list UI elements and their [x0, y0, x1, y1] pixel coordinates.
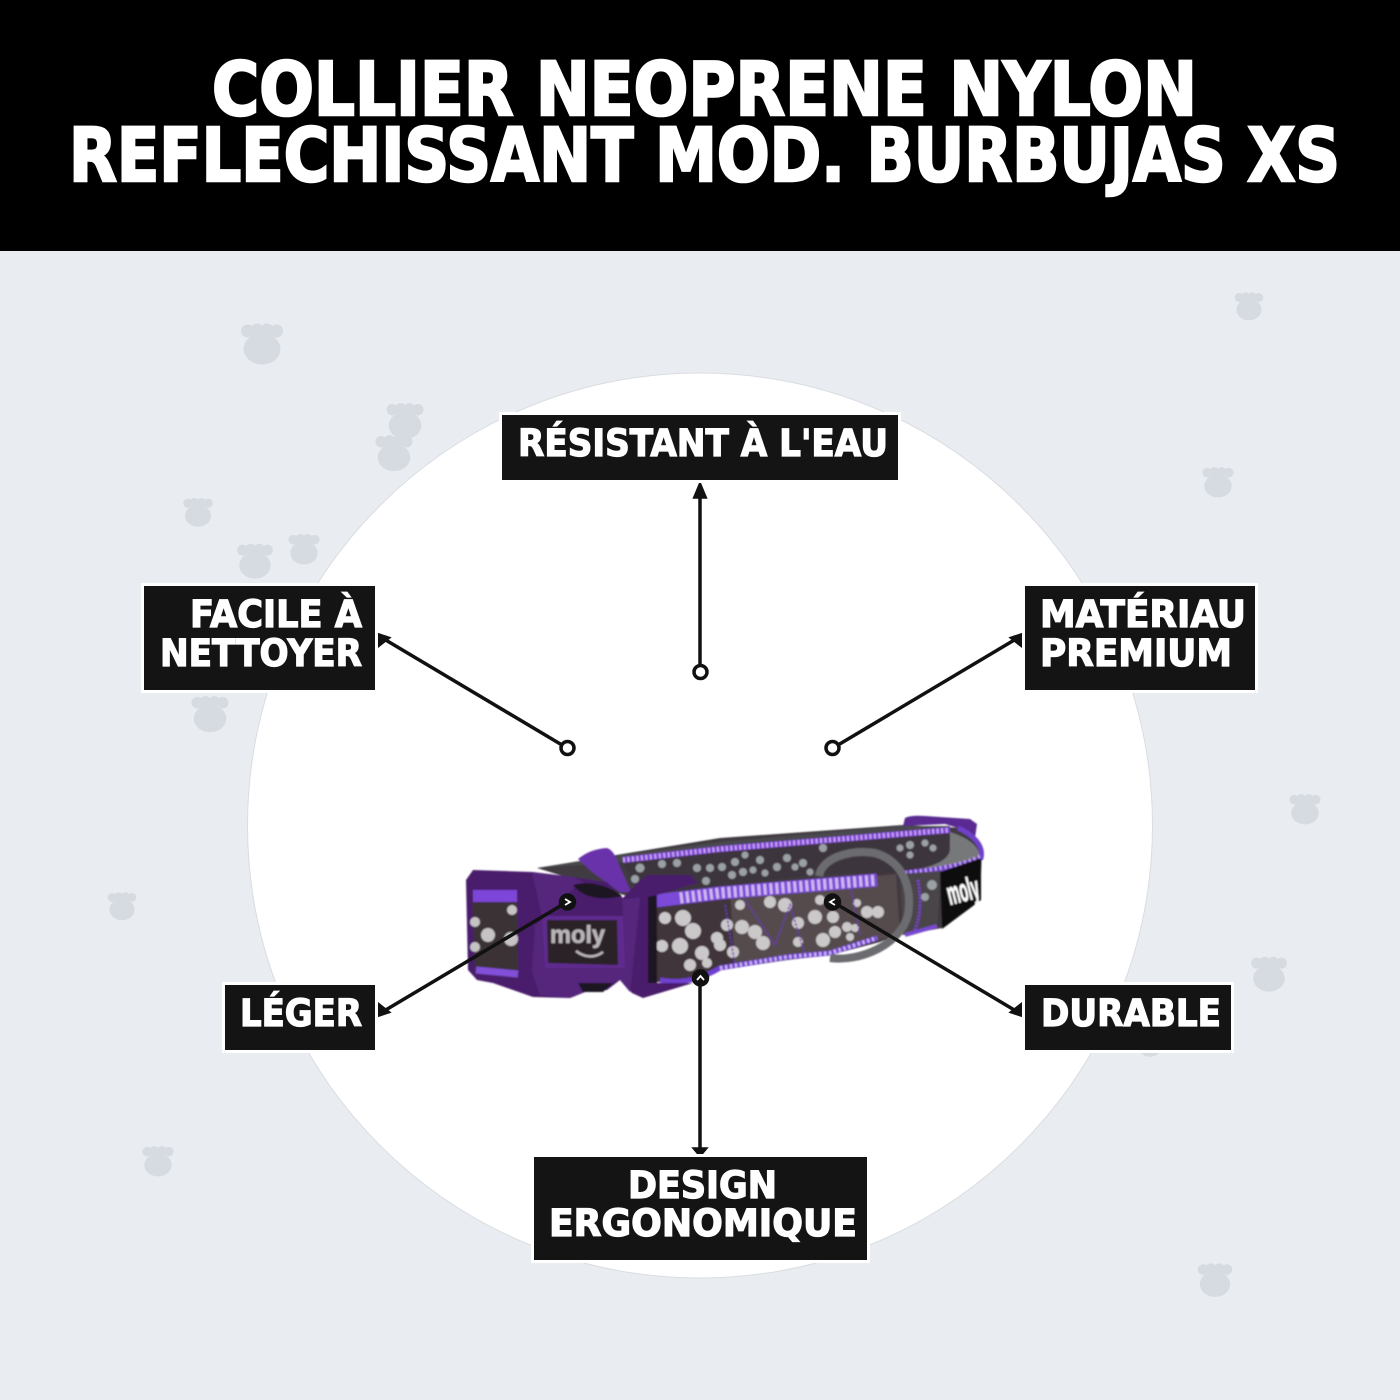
title line 1: COLLIER NEOPRENE NYLON: [212, 47, 1197, 133]
collar front strap: [648, 873, 902, 982]
arrow: durable: [826, 895, 1021, 1015]
arrow: résistant à l'eau: [694, 485, 707, 678]
back strap dots: [631, 840, 937, 901]
label: design ergonomique: DESIGN: [628, 1163, 777, 1207]
label: léger: [222, 982, 378, 1053]
background paw prints: [108, 292, 1321, 1297]
label: résistant à l'eau: [499, 412, 901, 483]
label: matériau premium: PREMIUM: [1040, 631, 1232, 675]
keeper loop: [578, 848, 631, 892]
header: title band: [0, 0, 1400, 251]
label: matériau premium: MATÉRIAU: [1040, 592, 1246, 636]
plastic buckle: moly: [550, 921, 605, 949]
label: facile à nettoyer: FACILE À: [190, 592, 362, 636]
label: léger: LÉGER: [240, 991, 362, 1035]
label: matériau premium: [1022, 583, 1258, 693]
moly tag: [940, 858, 981, 929]
label: facile à nettoyer: [141, 583, 378, 693]
label: facile à nettoyer: NETTOYER: [160, 631, 362, 675]
label: durable: [1022, 982, 1234, 1053]
arrow: design ergonomique: [694, 971, 708, 1155]
label: résistant à l'eau: RÉSISTANT À L'EAU: [518, 421, 888, 465]
arrow: facile à nettoyer: [379, 635, 574, 754]
label: design ergonomique: [531, 1154, 870, 1263]
label: durable: DURABLE: [1041, 991, 1221, 1035]
plastic buckle: [466, 870, 698, 998]
arrow: matériau premium: [826, 635, 1021, 754]
arrow: léger: [379, 895, 574, 1015]
white central circle: [248, 373, 1152, 1278]
text: moly: [943, 869, 983, 912]
front strap dots: [656, 895, 884, 971]
collar back strap: [537, 816, 983, 935]
label: design ergonomique: ERGONOMIQUE: [549, 1201, 857, 1245]
product photo: purple collar: [466, 816, 983, 998]
D-ring: [819, 852, 909, 959]
